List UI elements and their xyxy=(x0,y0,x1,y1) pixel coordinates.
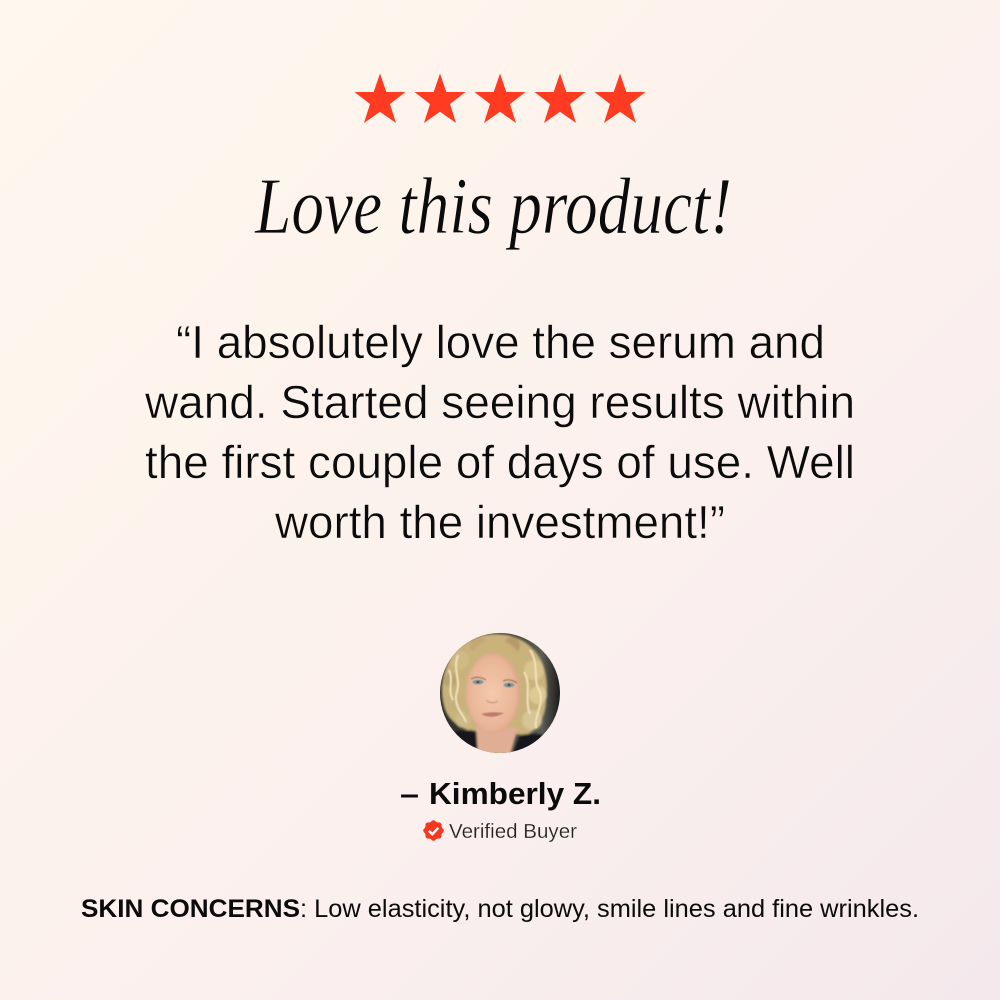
black top xyxy=(454,728,544,752)
fringe xyxy=(475,642,516,654)
skin concerns: SKIN CONCERNS xyxy=(81,895,300,923)
verified buyer label: Verified Buyer xyxy=(449,821,577,843)
skin concerns: : Low elasticity, not glowy, smile lines and fine wrinkles. xyxy=(300,895,919,923)
star rating xyxy=(354,74,646,123)
customer name: – xyxy=(400,776,419,811)
icon: verified check xyxy=(423,820,444,841)
testimonial quote: wand. Started seeing results within xyxy=(144,376,855,428)
testimonial quote: the first couple of days of use. Well xyxy=(145,436,855,488)
verified buyer badge xyxy=(423,820,577,843)
customer photo xyxy=(440,633,560,756)
neck xyxy=(476,726,518,756)
testimonial quote: worth the investment!” xyxy=(274,496,725,548)
face xyxy=(466,653,520,733)
customer name: Kimberly Z. xyxy=(429,776,601,811)
hair mass xyxy=(442,634,547,735)
testimonial quote: “I absolutely love the serum and xyxy=(176,316,825,368)
title: Love this product! xyxy=(254,163,732,251)
testimonial quote xyxy=(144,316,855,548)
